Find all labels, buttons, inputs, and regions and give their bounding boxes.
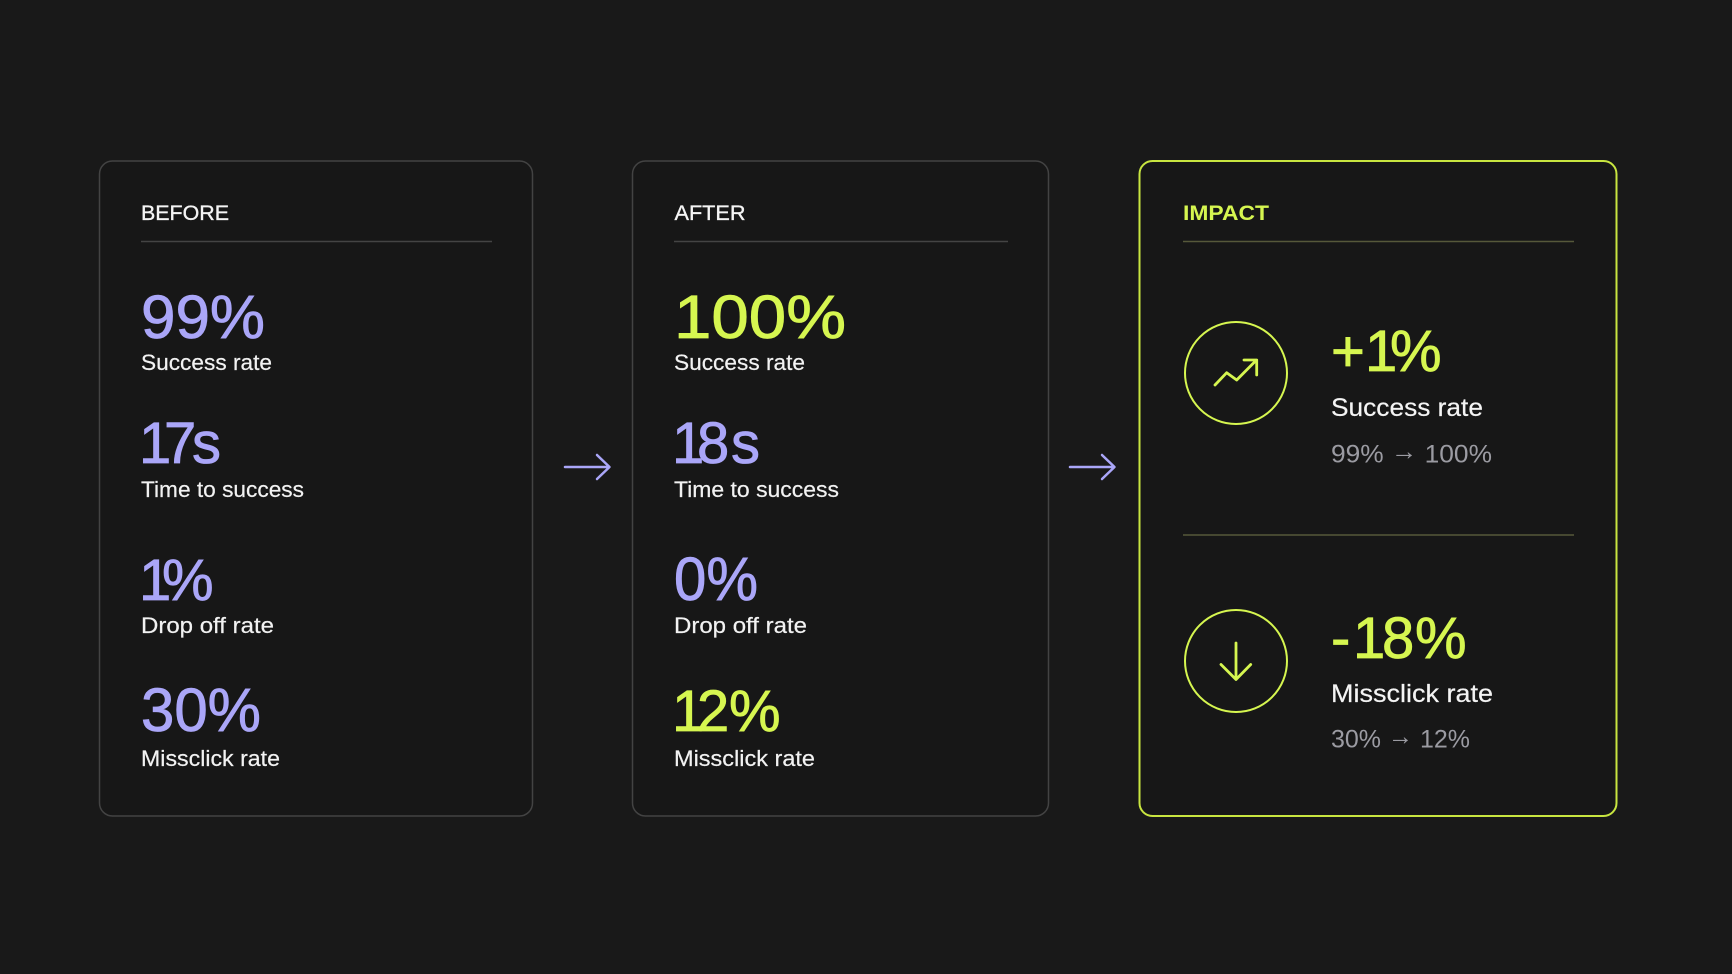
stat: before missclick rate	[141, 676, 280, 771]
stat: after missclick rate	[672, 679, 815, 771]
panel: impact	[1140, 161, 1616, 816]
stat: before drop off rate: Drop off rate	[141, 613, 274, 638]
stat: after drop off rate: Drop off rate	[674, 613, 807, 638]
stat: impact success rate: Success rate	[1331, 394, 1483, 422]
stat: impact missclick rate: -18%	[1331, 606, 1467, 671]
stat: before missclick rate: Missclick rate	[141, 746, 280, 771]
stat: after success rate: 100%	[674, 283, 846, 351]
heading: after: AFTER	[674, 202, 746, 225]
arrow: after to impact	[1070, 455, 1114, 479]
stat: before time to success: Time to success	[141, 477, 304, 502]
icon: arrow down	[1185, 610, 1287, 712]
stat: after time to success: 18s	[672, 411, 760, 476]
stat: after success rate: Success rate	[674, 350, 805, 375]
icon: trending up	[1185, 322, 1287, 424]
stat: impact success rate: 100%	[1425, 440, 1492, 468]
panel: before	[100, 161, 532, 816]
stat: impact missclick rate: →	[1388, 722, 1413, 750]
arrow: before to after	[565, 455, 610, 479]
stat: after missclick rate: 12%	[672, 679, 781, 744]
stat: before success rate: Success rate	[141, 350, 272, 375]
stat: impact success rate: 99%	[1331, 440, 1381, 468]
stat: before success rate	[141, 283, 272, 375]
stat: impact missclick rate	[1331, 606, 1493, 754]
stat: before time to success	[139, 411, 304, 502]
stat: after time to success	[672, 411, 839, 502]
stat: impact success rate: →	[1391, 438, 1417, 466]
stat: impact missclick rate: Missclick rate	[1331, 680, 1493, 708]
stat: after missclick rate: Missclick rate	[674, 746, 815, 771]
stat: after drop off rate: 0%	[674, 545, 758, 613]
heading: before: BEFORE	[141, 202, 229, 225]
stat: before drop off rate: 1%	[139, 548, 214, 613]
stat: before time to success: 17s	[139, 411, 221, 476]
stat: impact missclick rate: 12%	[1420, 726, 1470, 754]
stat: after time to success: Time to success	[674, 477, 839, 502]
stat: impact missclick rate: 30%	[1331, 726, 1381, 754]
stat: impact success rate	[1331, 319, 1492, 468]
stat: impact success rate: +1%	[1331, 319, 1442, 384]
stat: before success rate: 99%	[141, 283, 265, 351]
stat: after drop off rate	[674, 545, 807, 638]
stat: after success rate	[674, 283, 846, 375]
heading: impact: IMPACT	[1183, 202, 1269, 225]
stat: before drop off rate	[139, 548, 274, 638]
panel: after	[632, 161, 1048, 816]
stat: before missclick rate: 30%	[141, 676, 261, 744]
